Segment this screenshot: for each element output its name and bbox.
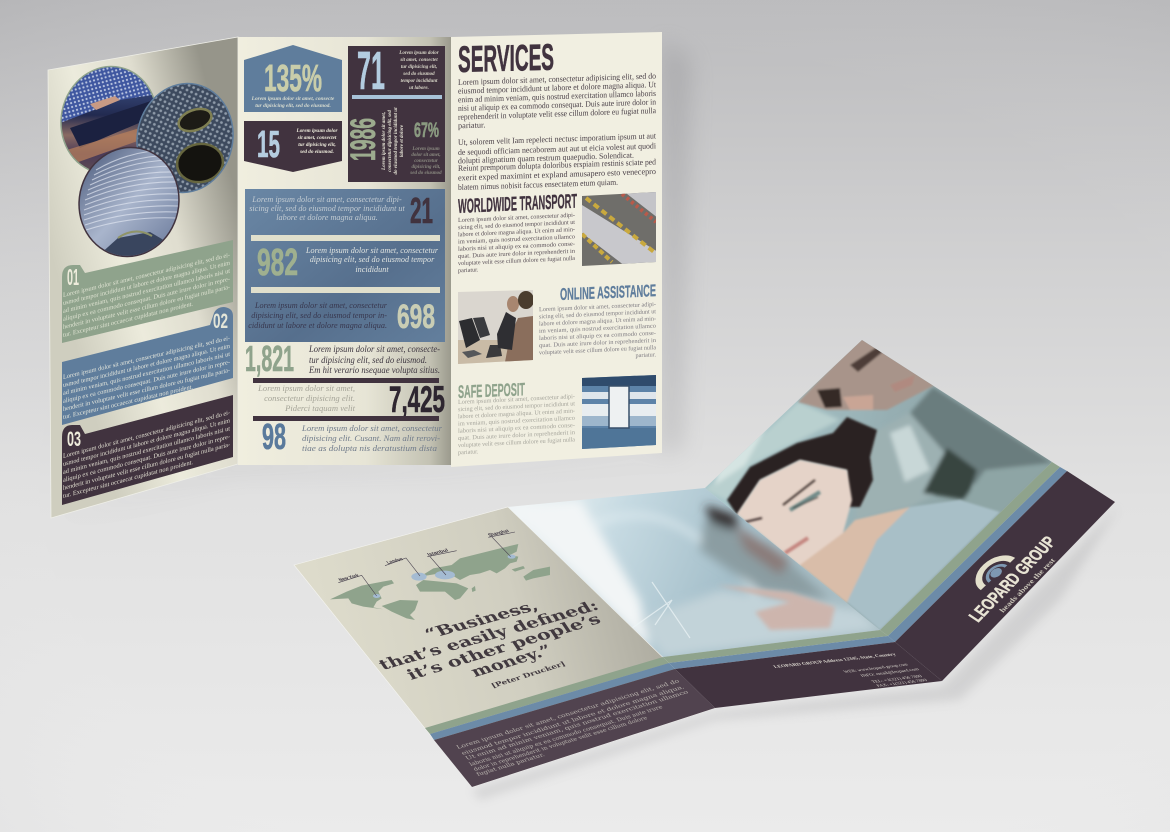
stat 698: Lorem ipsum dolor sit amet, consectetur: [254, 301, 388, 310]
map labels: [338, 529, 511, 583]
text block: worldwide transport: sicing elit, sed do eiusmod tempor incididunt ut: [458, 219, 575, 231]
text block 03: henderit in voluptate velit esse cillum dolore eu fugiat nulla paria-: [63, 441, 230, 492]
panel 02 blue: [62, 307, 233, 425]
text block: safe deposit: laboris nisi ut aliquip ex ea commodo conse-: [458, 422, 575, 435]
text block 02: [63, 335, 230, 421]
text block 02: usmod tempor incididunt ut labore et dolore magna aliqua. Ut enim: [63, 343, 230, 389]
text block 01: tur. Excepteur sint occaecat cupidatat non proident.: [63, 301, 193, 339]
text block 03: [63, 409, 230, 500]
logo name: LEOPARD GROUP: [965, 533, 1060, 625]
quote: “Business,: [421, 597, 542, 642]
text block: safe deposit: [458, 393, 575, 456]
text block: services intro: eiusmod tempor incididunt ut labore et dolore magna aliqua. Ut: [458, 80, 657, 96]
panel 01 green: [62, 240, 233, 343]
stat 7,425: Lorem ipsum dolor sit amet,: [257, 383, 355, 393]
stat 982: dipisicing elit, sed do eiusmod tempor: [310, 255, 435, 264]
stat box 15: Lorem ipsum dolor: [296, 128, 338, 134]
text block: worldwide transport: Lorem ipsum dolor sit amet, consectetur adipi-: [458, 212, 575, 224]
text block: services intro: exerit exped maximint et expland amusapero esto venecepro: [458, 167, 656, 182]
contact text: INFO: email@leopard.com: [860, 667, 921, 678]
text block: services intro: nisi ut aliquip ex ea commodo consequat. Duis aute irure dolor in: [458, 97, 657, 113]
stat box 15: [244, 121, 342, 172]
map labels: Shanghai: [487, 529, 511, 538]
stat 1,821: 1,821: [245, 338, 294, 379]
panel 01 green: 01: [67, 264, 79, 290]
footer text: fugiat nulla pariatur.: [476, 753, 546, 778]
dark stat column: tempor incididunt: [401, 79, 438, 84]
stat 698: [248, 298, 435, 336]
text block: services intro: enim ad minim veniam, quis nostrud exercitation ullamco laboris: [458, 89, 656, 104]
text block: worldwide transport: quat. Duis aute irure dolor in reprehenderit in: [458, 248, 575, 260]
icon: logo arches: [971, 552, 1014, 589]
stat 98: 98: [262, 416, 286, 457]
stat 1,821: tur dipisicing elit, sed do eiusmod.: [309, 355, 427, 365]
facial features: [745, 480, 820, 553]
stat box 15: sed do eiusmod.: [299, 149, 334, 155]
stat 982: [257, 242, 439, 284]
text block: safe deposit: voluptate velit esse cillum dolore eu fugiat nulla: [458, 436, 575, 449]
dark stat column: labore et dolore: [400, 124, 405, 157]
stat 1,821: [245, 338, 440, 379]
panel: lower brochure left: [294, 507, 715, 787]
footer text: Lorem ipsum dolor sit amet, consectetur adipisicing elit, sed do: [456, 679, 681, 751]
dark stat column: 71: [357, 41, 385, 101]
map labels: Istanbul: [426, 548, 450, 558]
stat 67%: 67%: [414, 119, 439, 142]
text block 02: ad minim veniam, quis nostrud exercitation ullamco laboris nisi ut: [63, 351, 230, 397]
logo tagline: heads above the rest: [997, 557, 1057, 614]
stat 21: sicing elit, sed do eiusmod tempor incididunt ut: [249, 204, 405, 213]
contact text: LEOPARD GROUP Address 12345, State, Country: [773, 653, 898, 669]
text block 03: Lorem ipsum dolor sit amet, consectetur adipisicing elit, sed do ei-: [63, 409, 230, 460]
dark stat column: sit amet, consectet: [399, 58, 438, 63]
man's face: [798, 336, 935, 410]
stat 7,425: [257, 379, 445, 420]
footer text: [456, 679, 690, 778]
dark stat column: dolor sit amet,: [411, 153, 441, 158]
text block: online assistance: quat. Duis aute irure dolor in reprehenderit in: [539, 337, 656, 349]
dark stat column: dipisicing elit,: [412, 165, 440, 170]
text block 02: henderit in voluptate velit esse cillum dolore eu fugiat nulla paria-: [63, 367, 230, 413]
contact text: TEL: +1(321) 456 7890: [870, 674, 924, 684]
dark stat column: ut labore.: [409, 86, 429, 91]
text block 02: tur. Excepteur sint occaecat cupidatat non proident.: [63, 383, 193, 421]
dark stat column: do eiusmod tempor incididunt ut: [394, 107, 399, 174]
quote: that’s easily defined:: [375, 597, 602, 673]
quote: money.”: [467, 641, 556, 680]
panel: lower brochure centre photo: [508, 488, 942, 708]
text block: worldwide transport: [458, 212, 575, 274]
shadow: lower brochure: [472, 505, 1120, 800]
photo: parking lot: [580, 190, 658, 268]
stat 98: dipisicing elit. Cusant. Nam alit rerovi-: [302, 433, 440, 443]
stat hexagon 135%: Lorem ipsum dolor sit amet, consecte: [251, 96, 335, 102]
text block: services intro: Reiunt premporum dolupta doloribus erspiaim restinis sciate ped: [458, 157, 657, 173]
text block 03: ad minim veniam, quis nostrud exercitation ullamco laboris nisi ut: [63, 425, 230, 476]
text block: safe deposit: Lorem ipsum dolor sit amet, consectetur adipi-: [458, 393, 575, 406]
stat 982: incididunt: [355, 265, 389, 274]
photo: warehouse door: [582, 375, 656, 449]
text block: services intro: Ut, solorem velit Iam repelecti nectusc imporatium ipsum ut aut: [458, 131, 657, 147]
dark stat column: consectetur: [414, 159, 438, 164]
stat box 15: sit amet, consectet: [297, 135, 337, 141]
heading: safe deposit: SAFE DEPOSIT: [458, 379, 525, 402]
quote: it’s other people’s: [403, 610, 604, 683]
dark stat column: [344, 41, 445, 182]
stat 982: 982: [257, 242, 298, 284]
text block 03: tur. Excepteur sint occaecat cupidatat non proident.: [63, 459, 193, 500]
text block: worldwide transport: voluptate velit esse cillum dolore eu fugiat nulla: [458, 255, 575, 267]
text block 03: aliquip ex ea commodo consequat. Duis aute irure dolor in repre-: [63, 433, 230, 484]
stat 7,425: consectetur dipisicing elit.: [264, 393, 355, 403]
bands: [663, 630, 888, 663]
stat box 15: tur dipisicing elit,: [298, 142, 336, 148]
text block: services intro: de sequodi officiam necaborem aut aut ut eicia volest aut quodi: [458, 141, 657, 157]
text block 01: usmod tempor incididunt ut labore et dolore magna aliqua. Ut enim: [63, 260, 230, 307]
background window and shirt: [708, 386, 1051, 510]
panel: lower brochure right photo: [705, 336, 1067, 642]
text block: services intro: blatem nimus nobisit faccus ensectatem etum quiam.: [458, 178, 618, 192]
sweater: [847, 500, 1000, 630]
stat 698: cididunt ut labore et dolore magna aliqua.: [248, 321, 387, 330]
text block 02: aliquip ex ea commodo consequat. Duis aute irure dolor in repre-: [63, 359, 230, 405]
dark stat column: sed do eiusmod: [402, 72, 435, 77]
text block: online assistance: sicing elit, sed do eiusmod tempor incididunt ut: [539, 308, 656, 320]
stat 21: Lorem ipsum dolor sit amet, consectetur dipi-: [251, 195, 402, 204]
text block: services intro: reprehenderit in voluptate velit esse cillum dolore eu fugiat nulla: [458, 106, 656, 122]
stat 98: tiae as dolupta nis deratustium dista: [302, 443, 437, 453]
heading: services: SERVICES: [458, 37, 554, 80]
stat 1,821: Lorem ipsum dolor sit amet, consecte-: [308, 344, 440, 354]
text block: safe deposit: sicing elit, sed do eiusmod tempor incididunt ut: [458, 400, 575, 413]
text block 01: [63, 252, 230, 339]
blue stats block: [245, 189, 445, 342]
text block 03: usmod tempor incididunt ut labore et dolore magna aliqua. Ut enim: [63, 417, 230, 468]
panel: upper brochure left: [48, 37, 244, 518]
text block: worldwide transport: laboris nisi ut aliquip ex ea commodo conse-: [458, 241, 575, 253]
text block: worldwide transport: im veniam, quis nostrud exercitation ullamco: [458, 233, 575, 246]
text block 01: henderit in voluptate velit esse cillum dolore eu fugiat nulla paria-: [63, 284, 230, 331]
dark stat column: tur dipisicing elit,: [401, 65, 437, 70]
bands: [880, 462, 1060, 636]
contact text: WEB: www.leopard-group.com: [843, 663, 910, 674]
stat 21: 21: [410, 190, 433, 231]
contact text: [773, 653, 929, 688]
stat 21: labore et dolore magna aliqua.: [276, 213, 378, 222]
text block 01: ad minim veniam, quis nostrud exercitation ullamco laboris nisi ut: [63, 268, 230, 315]
stat hexagon 135%: tur dipisicing elit, sed do eiusmod.: [255, 103, 331, 109]
text block 01: aliquip ex ea commodo consequat. Duis aute irure dolor in repre-: [63, 276, 230, 323]
text block: services intro: pariatur.: [458, 120, 485, 130]
stat 698: dipisicing elit, sed do eiusmod tempor in-: [251, 311, 387, 320]
stat 98: [262, 416, 443, 457]
photo: call centre: [458, 290, 533, 364]
photo circle: ship at sunset: [60, 66, 154, 170]
dark stat column: sed do eiusmod: [409, 171, 442, 176]
text block: services intro: [458, 71, 657, 192]
text block: online assistance: [539, 301, 656, 364]
footer panel: [434, 669, 715, 787]
dark stat column: Lorem ipsum dolor: [398, 51, 439, 56]
stat 7,425: 7,425: [389, 379, 445, 420]
world map: [330, 529, 550, 620]
stat 1,821: Em hit verario nsequae volupta sitius.: [308, 365, 440, 375]
text block: online assistance: pariatur.: [636, 351, 656, 359]
footer text: eiusmod tempor incididunt ut labore et dolore magna aliqua.: [461, 685, 686, 757]
stat hexagon 135%: 135%: [264, 58, 322, 100]
number 03: 03: [67, 428, 81, 451]
photo circle: curved building: [78, 146, 180, 258]
footer text: dolor in reprehenderit in voluptate velit esse cillum dolore: [473, 716, 649, 773]
woman's face: [737, 460, 1000, 630]
neck and shoulder: [800, 507, 910, 603]
photo circle: perforated building: [136, 82, 234, 194]
map labels: London: [386, 557, 405, 566]
text block: safe deposit: labore et dolore magna aliqua. Ut enim ad min-: [458, 408, 575, 420]
stat 698: 698: [397, 298, 435, 336]
text block: online assistance: im veniam, quis nostrud exercitation ullamco: [539, 323, 656, 335]
stat hexagon 135%: [244, 45, 342, 112]
text block: safe deposit: quat. Duis aute irure dolor in reprehenderit in: [458, 429, 575, 442]
contact text: FAX: +1(321) 456 7890: [875, 678, 929, 688]
text block 02: Lorem ipsum dolor sit amet, consectetur adipisicing elit, sed do ei-: [63, 335, 230, 381]
footer text: Ut enim ad minim veniam, quis nostrud exercitation ullamco: [465, 690, 690, 762]
stat 982: Lorem ipsum dolor sit amet, consectetur: [305, 246, 439, 255]
bands: [425, 657, 669, 734]
text block: online assistance: Lorem ipsum dolor sit amet, consectetur adipi-: [539, 301, 656, 313]
panel: upper brochure services: [451, 32, 662, 467]
panel: upper brochure services: WORLDWIDE TRANSPORT: [458, 191, 577, 218]
dark stat column: consectetur dipisicing elit, sed: [388, 110, 393, 172]
map labels: New York: [338, 573, 361, 583]
dark stat column: Lorem ipsum: [411, 147, 440, 152]
stat 98: Lorem ipsum dolor sit amet, consectetur: [301, 423, 443, 433]
footer text: laboris nisi ut aliquip ex ea commodo consequat. Duis aute irure: [469, 705, 665, 768]
quote attribution: [Peter Drucker]: [489, 660, 567, 690]
text block: worldwide transport: labore et dolore magna aliqua. Ut enim ad min-: [458, 226, 575, 238]
text block: online assistance: labore et dolore magna aliqua. Ut enim ad min-: [539, 315, 656, 328]
panel: upper brochure middle: [238, 37, 451, 465]
text block: online assistance: laboris nisi ut aliquip ex ea commodo conse-: [539, 330, 656, 342]
stat 1986: 1986: [344, 118, 383, 161]
woman's hair: [727, 417, 877, 515]
text block: safe deposit: im veniam, quis nostrud exercitation ullamco: [458, 415, 575, 428]
number 02: 02: [213, 310, 228, 333]
panel 03 dark: [62, 395, 233, 505]
quote: [375, 597, 604, 690]
text block 01: Lorem ipsum dolor sit amet, consectetur adipisicing elit, sed do ei-: [63, 252, 230, 299]
text block: services intro: dolupti alignatium quam restrum quaepudio. Solendicat.: [458, 151, 634, 165]
stat box 15: 15: [257, 124, 280, 166]
text block: services intro: Lorem ipsum dolor sit amet, consectetur adipisicing elit, sed do: [458, 71, 656, 87]
dark stat column: Lorem ipsum dolor sit amet,: [382, 112, 387, 171]
text block: safe deposit: pariatur.: [458, 448, 479, 456]
panel: lower brochure cover: [895, 471, 1115, 681]
text block: worldwide transport: pariatur.: [458, 266, 479, 274]
stat 21: [249, 190, 433, 231]
contact panel: [675, 642, 942, 708]
stat 7,425: Piderci taquam velit: [284, 403, 356, 413]
shadow: upper brochure: [52, 40, 690, 518]
heading: online assistance: ONLINE ASSISTANCE: [560, 281, 656, 304]
text block: online assistance: voluptate velit esse cillum dolore eu fugiat nulla: [539, 344, 656, 356]
